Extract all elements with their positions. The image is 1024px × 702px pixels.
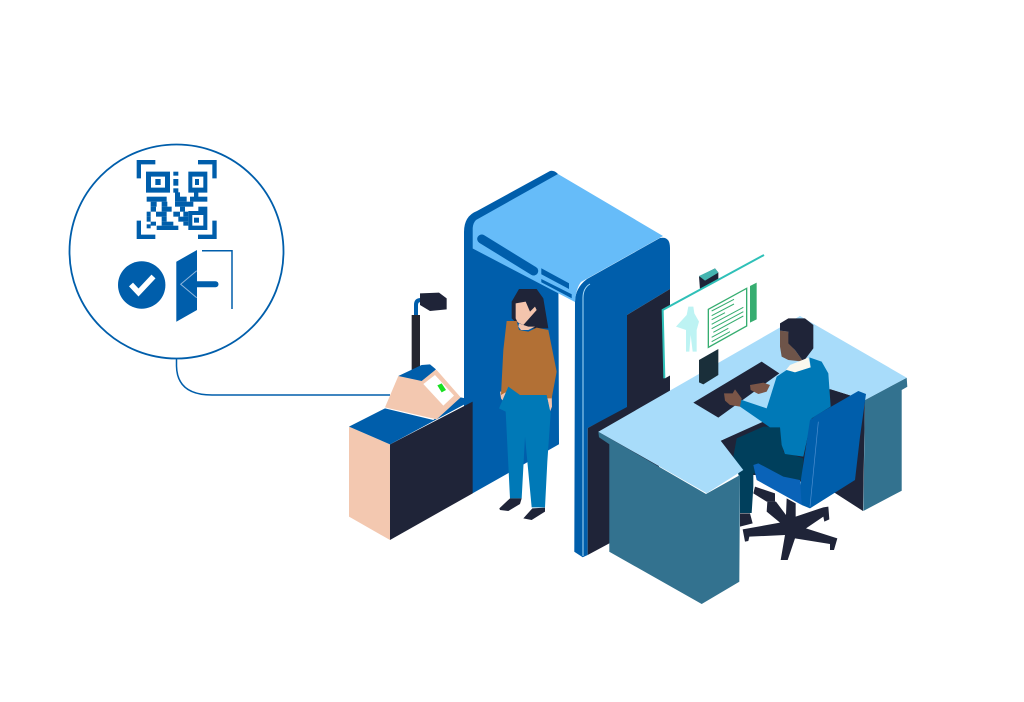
person trousers [499,387,551,507]
icon: QR code [137,160,217,239]
person sweater [501,321,557,398]
person face [516,302,537,325]
chair base and operator lower body [733,427,837,560]
operator legs [733,427,803,513]
keyboard [693,362,779,418]
desk left pedestal [598,432,740,604]
operator desk [598,316,907,604]
operator head [780,318,813,362]
person hands [500,392,552,412]
monitor stand [699,349,718,384]
desk top [598,316,907,493]
scanner top [398,364,436,381]
scanner screen [423,375,454,406]
body scan silhouette [676,307,699,352]
monitor edge [663,255,764,378]
green status bar [750,283,757,323]
callout circle with icons [70,144,284,358]
gate dark inner wall [588,289,670,555]
check-in kiosk [349,293,473,540]
monitor and keyboard [663,255,779,418]
office chair [753,391,866,508]
operator sweater [740,357,831,457]
chair base [743,498,837,560]
person shoes [499,498,545,520]
person neck [518,323,535,330]
kiosk pole and camera [412,293,447,370]
kiosk front face [390,402,473,540]
gate right pillar [574,238,670,557]
monitor screen [663,255,763,378]
desk kneehole [720,389,865,511]
kiosk side face [349,427,390,540]
operator shoe [740,513,753,527]
scan data panel [708,288,747,347]
gate back panel [464,171,559,493]
gate pillar highlight [583,284,590,556]
scanner body [385,370,461,419]
callout connector line [176,358,390,395]
webcam [699,268,718,289]
operator collar [786,358,811,372]
gate top surface [473,174,663,302]
desk right pedestal [863,378,907,511]
icon: check mark badge [118,261,165,309]
person standing in gate [499,289,557,520]
icon: entry door with arrow [176,250,232,322]
gate vents [482,239,572,298]
seated operator upper body [724,318,831,457]
security gate frame [464,171,670,557]
kiosk top surface [349,397,473,444]
operator far foot [753,487,775,502]
person hair [512,289,548,328]
operator hands [724,383,770,407]
